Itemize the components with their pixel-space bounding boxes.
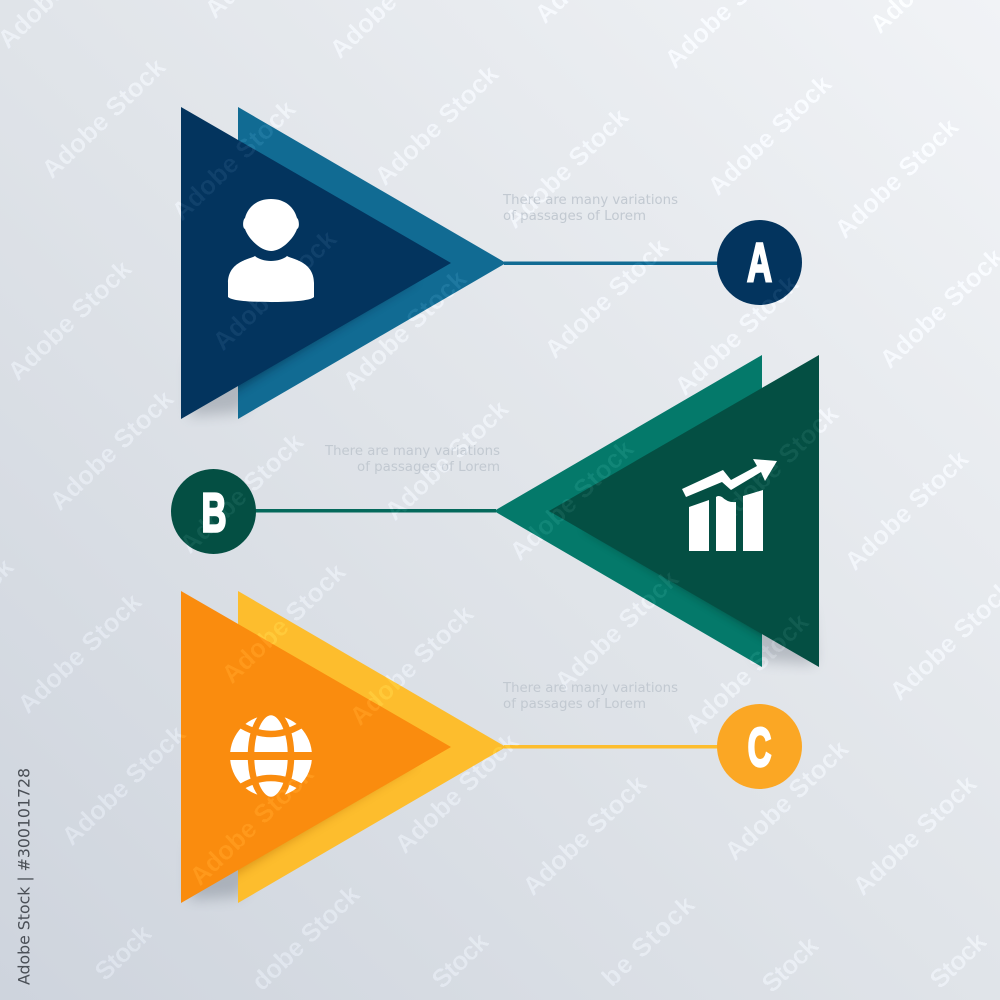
connector: A line (504, 262, 718, 265)
C ground shadow (190, 844, 270, 900)
A front triangle (181, 107, 451, 419)
watermark pattern: Adobe Stock (838, 443, 975, 576)
watermark pattern: Stock (755, 930, 825, 998)
B front triangle (549, 355, 819, 667)
watermark pattern: Adobe Stock (378, 393, 515, 526)
badge: C: C (748, 716, 771, 778)
watermark pattern: Adobe Stock (388, 726, 525, 859)
caption: C: of passages of Lorem (503, 697, 646, 712)
watermark pattern: Stock (425, 926, 495, 994)
watermark pattern: Adobe Stock (828, 111, 965, 244)
watermark pattern: Adobe Stock (498, 101, 635, 234)
B ground shadow (735, 608, 815, 664)
badge: A (717, 220, 802, 305)
caption: C: There are many variations (502, 681, 678, 696)
watermark pattern: Stock (88, 918, 158, 986)
badge: B: B (201, 481, 227, 543)
watermark pattern: Adobe Stock (173, 426, 310, 559)
watermark pattern: Adobe Stock (206, 223, 343, 356)
watermark pattern: Adobe Stock (538, 231, 675, 364)
watermark pattern: Adobe Stock (215, 556, 352, 689)
B inner shadow (586, 532, 762, 640)
icon: person (228, 199, 314, 302)
icon: rising bar chart (682, 459, 777, 551)
A inner shadow (238, 285, 414, 394)
watermark pattern: Adobe Stock (11, 586, 148, 719)
watermark pattern: Adobe Stock (846, 768, 983, 901)
watermark pattern: Adobe Stock (343, 598, 480, 731)
icon: globe (230, 712, 312, 800)
panel: A triangle group (181, 107, 506, 424)
A ground shadow (190, 360, 270, 416)
C back triangle (238, 591, 506, 903)
watermark pattern: Adobe Stock (678, 606, 815, 739)
watermark pattern: Adobe Stock (708, 398, 845, 531)
panel: C triangle group (181, 591, 506, 908)
caption: B: of passages of Lorem (357, 460, 500, 475)
watermark pattern: be Stock (595, 889, 701, 992)
watermark pattern: Adobe Stock (368, 58, 505, 191)
watermark pattern: Adobe Stock (503, 433, 640, 566)
badge: A: A (747, 231, 772, 293)
A back triangle (238, 107, 506, 419)
connector: C line (504, 745, 718, 748)
C front triangle (181, 591, 451, 903)
caption: A: of passages of Lorem (503, 209, 646, 224)
connector: B line (255, 509, 496, 512)
caption: A: There are many variations (502, 193, 678, 208)
caption: B: There are many variations (324, 444, 500, 459)
B back triangle (494, 355, 762, 667)
stock id label: Adobe Stock | #300101728 (14, 768, 34, 985)
watermark pattern: dobe Stock (245, 879, 366, 996)
watermark pattern: Adobe Stock (336, 263, 473, 396)
badge: B (171, 469, 256, 554)
panel: B triangle group (494, 355, 825, 672)
watermark pattern: Adobe Stock (668, 268, 805, 401)
watermark pattern: Adobe Stock (55, 718, 192, 851)
watermark pattern: Adobe Stock (701, 68, 838, 201)
watermark pattern: Adobe Stock (43, 383, 180, 516)
badge: C (717, 704, 802, 789)
watermark pattern: Adobe Stock (516, 768, 653, 901)
watermark pattern: Adobe Stock (35, 51, 172, 184)
watermark pattern: Adobe Stock (183, 758, 320, 891)
watermark pattern: Stock (923, 926, 993, 994)
watermark pattern: Adobe Stock (718, 733, 855, 866)
watermark pattern: Adobe Stock (1, 253, 138, 386)
watermark pattern: Adobe Stock (548, 563, 685, 696)
C inner shadow (238, 770, 412, 878)
watermark pattern: Adobe Stock (165, 93, 302, 226)
